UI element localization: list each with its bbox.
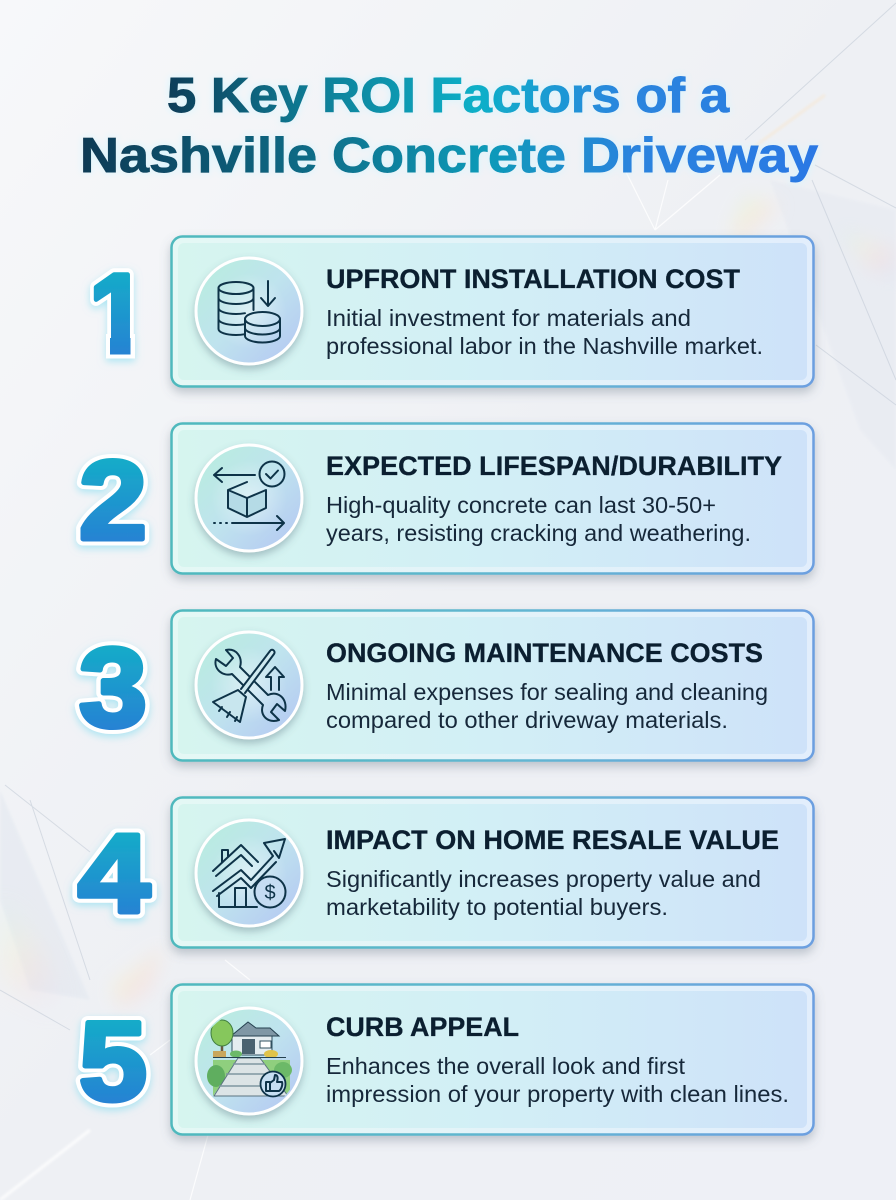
panel: expected lifespan/durability (172, 424, 814, 574)
icon: box with arrows and check (196, 445, 302, 551)
description: Significantly increases property value and (326, 866, 761, 892)
panel: upfront installation cost (172, 236, 814, 386)
number 5: 5 (79, 999, 147, 1124)
description (326, 305, 763, 359)
panel: curb appeal (172, 984, 814, 1134)
number 5: 5 (79, 999, 147, 1124)
description: impression of your property with clean lines. (326, 1081, 789, 1107)
description: Enhances the overall look and first (326, 1053, 686, 1079)
icon: house with rising arrow and dollar coin (196, 820, 302, 926)
number 3: 3 (79, 625, 147, 750)
icon: house with driveway and thumbs up (196, 1008, 302, 1114)
title: Nashville Concrete Driveway (80, 129, 818, 183)
description (326, 679, 768, 733)
panel: impact on home resale value (172, 798, 814, 948)
card background (172, 424, 814, 574)
number 4: 4 (78, 811, 150, 936)
icon: wrench, broom and up arrow (196, 632, 302, 738)
description (326, 1053, 789, 1107)
icon: house with rising arrow and dollar coin: $ (264, 882, 276, 904)
description: Minimal expenses for sealing and cleaning (326, 679, 768, 705)
card background (172, 984, 814, 1134)
heading: CURB APPEAL (326, 1012, 519, 1042)
card background (172, 610, 814, 760)
description: High-quality concrete can last 30-50+ (326, 492, 716, 518)
heading: IMPACT ON HOME RESALE VALUE (326, 825, 779, 855)
icon: coin stacks with down arrow (196, 258, 302, 364)
title (80, 69, 818, 183)
number 1: 1 (89, 251, 147, 376)
description (326, 492, 751, 546)
number 1: 1 (89, 251, 147, 376)
card background (172, 236, 814, 386)
number 4: 4 (78, 811, 150, 936)
description: marketability to potential buyers. (326, 894, 668, 920)
description: Initial investment for materials and (326, 305, 691, 331)
card background (172, 798, 814, 948)
description: professional labor in the Nashville market. (326, 333, 763, 359)
description (326, 866, 761, 920)
title: 5 Key ROI Factors of a (167, 69, 730, 123)
heading: EXPECTED LIFESPAN/DURABILITY (326, 451, 782, 481)
heading: ONGOING MAINTENANCE COSTS (326, 638, 763, 668)
number 1 (86, 266, 140, 366)
number 2: 2 (79, 438, 147, 563)
panel: ongoing maintenance costs (172, 610, 814, 760)
number 2: 2 (79, 438, 147, 563)
description: years, resisting cracking and weathering. (326, 520, 751, 546)
heading: UPFRONT INSTALLATION COST (326, 264, 741, 294)
number 3: 3 (79, 625, 147, 750)
description: compared to other driveway materials. (326, 707, 728, 733)
